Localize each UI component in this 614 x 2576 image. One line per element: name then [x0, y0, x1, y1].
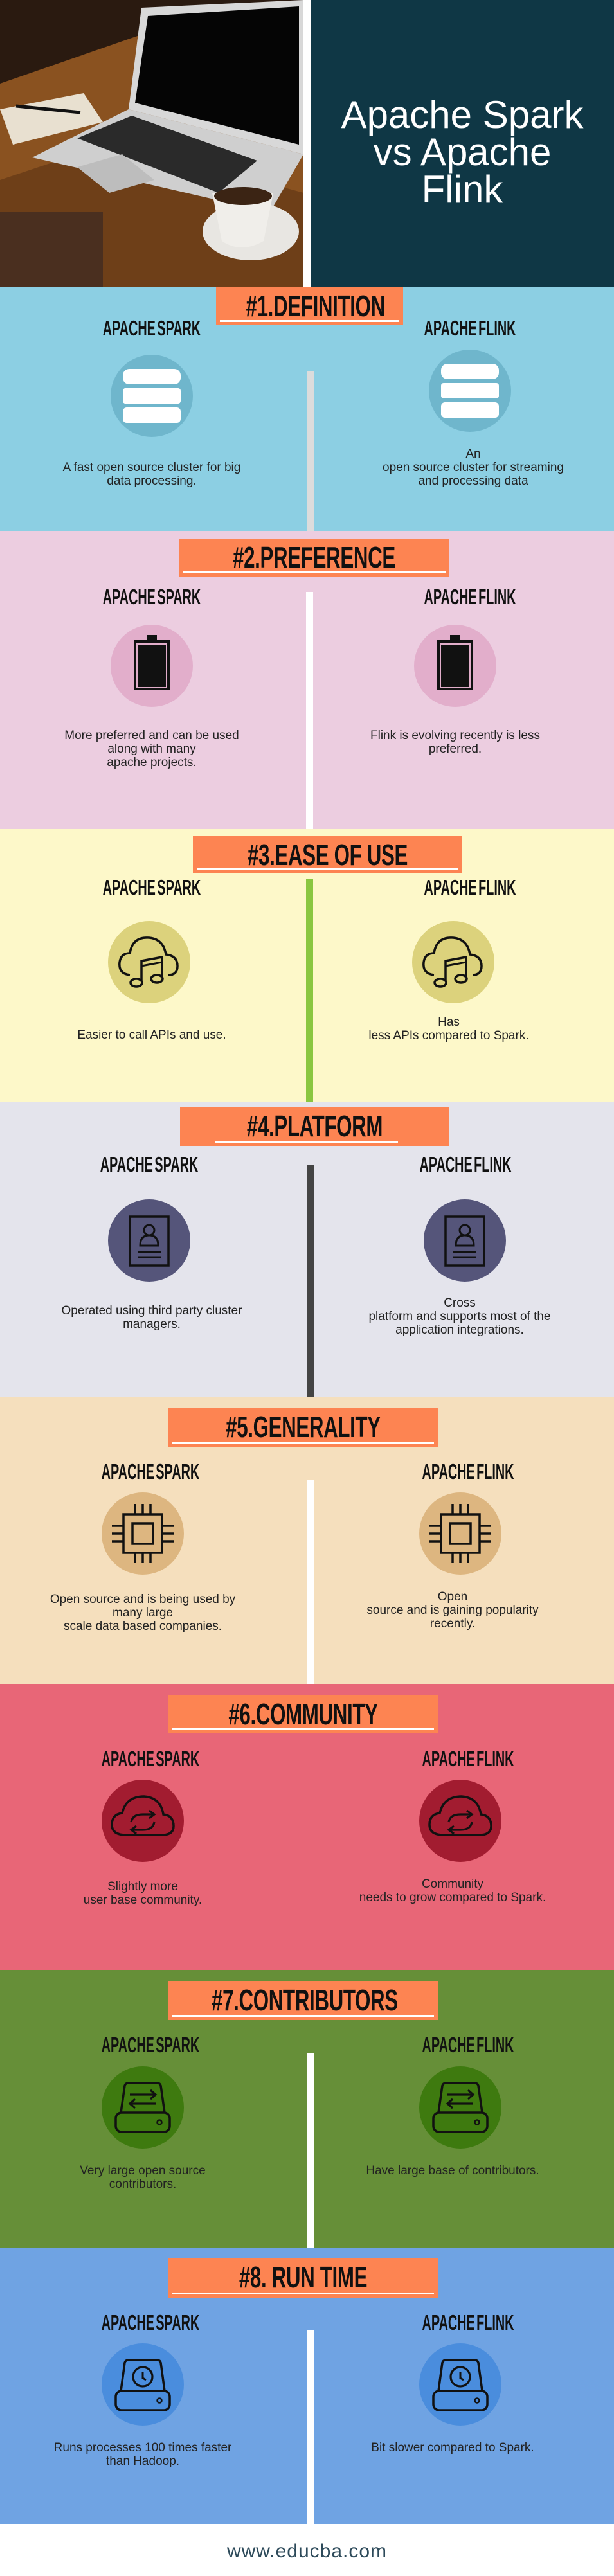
title: vs Apache: [374, 130, 551, 174]
panel: contributors: [0, 1970, 614, 2248]
header: title panel: [311, 0, 614, 287]
text: spark: user base community.: [84, 1893, 202, 1907]
footer: website: www.educba.com: [227, 2541, 387, 2562]
text: flink: Flink is evolving recently is less: [370, 729, 540, 742]
text: spark: managers.: [123, 1318, 181, 1331]
heading: ease of use: [193, 836, 462, 873]
text: flink: Community: [422, 1877, 483, 1891]
text: flink: preferred.: [429, 742, 482, 756]
panel: run time: [0, 2248, 614, 2524]
panel: generality: [0, 1397, 614, 1684]
text: flink: source and is gaining popularity: [366, 1604, 539, 1617]
text: spark: [63, 461, 240, 488]
heading: community: #6.COMMUNITY: [228, 1697, 378, 1731]
text: flink: Open: [438, 1590, 467, 1604]
text: flink: [359, 1877, 546, 1904]
divider: [307, 1480, 314, 1684]
text: spark: scale data based companies.: [64, 1620, 222, 1633]
text: spark: Easier to call APIs and use.: [77, 1028, 226, 1042]
icon: chip flink: [419, 1492, 501, 1575]
title: Apache Spark: [341, 93, 583, 136]
heading: platform: #4.PLATFORM: [247, 1109, 383, 1143]
icon: drive arrows spark: [102, 2066, 184, 2149]
panel: ease of use: [0, 829, 614, 1102]
heading: preference: #2.PREFERENCE: [233, 541, 395, 574]
heading: run time: [168, 2258, 438, 2298]
subheading: spark: APACHE SPARK: [102, 2033, 199, 2057]
subheading: flink: APACHE FLINK: [422, 1460, 514, 1483]
icon: drive clock spark: [102, 2343, 184, 2426]
text: spark: [64, 729, 239, 769]
text: spark: Operated using third party cluster: [62, 1304, 242, 1318]
text: flink: Has: [438, 1015, 460, 1029]
subheading: spark: APACHE SPARK: [103, 585, 201, 609]
text: spark: than Hadoop.: [106, 2455, 179, 2468]
icon: cloud sync spark: [102, 1780, 184, 1862]
heading: generality: [168, 1408, 438, 1447]
icon: clipboard spark: [111, 625, 193, 707]
icon: drive clock flink: [419, 2343, 501, 2426]
text: spark: many large: [113, 1606, 173, 1620]
heading: definition: [216, 287, 403, 325]
subheading: flink: APACHE FLINK: [424, 875, 516, 899]
icon: chip spark: [102, 1492, 184, 1575]
icon: cloud music spark: [108, 921, 190, 1003]
subheading: spark: APACHE SPARK: [100, 1152, 198, 1176]
subheading: spark: APACHE SPARK: [103, 875, 201, 899]
text: flink: recently.: [430, 1617, 475, 1631]
heading: run time: #8. RUN TIME: [239, 2260, 367, 2294]
divider: [306, 879, 313, 1102]
icon: database flink: [429, 350, 511, 432]
subheading: flink: APACHE FLINK: [422, 1747, 514, 1771]
text: flink: needs to grow compared to Spark.: [359, 1891, 546, 1904]
subheading: flink: APACHE FLINK: [420, 1152, 511, 1176]
text: spark: Very large open source: [80, 2164, 206, 2178]
subheading: flink: APACHE FLINK: [422, 2033, 514, 2057]
text: spark: data processing.: [107, 474, 197, 488]
text: spark: [54, 2441, 231, 2468]
text: spark: [84, 1880, 202, 1907]
text: flink: [368, 1015, 529, 1042]
subheading: flink: APACHE FLINK: [424, 316, 516, 340]
text: spark: [62, 1304, 242, 1331]
text: spark: apache projects.: [107, 756, 197, 769]
subheading: spark: APACHE SPARK: [102, 2311, 199, 2334]
heading: contributors: #7.CONTRIBUTORS: [212, 1983, 398, 2017]
text: flink: [368, 1296, 551, 1337]
text: flink: application integrations.: [395, 1323, 524, 1337]
divider: [306, 592, 313, 829]
divider: [307, 371, 314, 531]
text: flink: [370, 729, 540, 756]
panel: community: [0, 1684, 614, 1970]
text: spark: A fast open source cluster for big: [63, 461, 240, 474]
text: spark: along with many: [107, 742, 196, 756]
text: flink: open source cluster for streaming: [383, 461, 564, 474]
divider: [307, 2053, 314, 2248]
icon: profile flink: [424, 1199, 506, 1282]
heading: generality: #5.GENERALITY: [226, 1410, 381, 1444]
icon: cloud music flink: [412, 921, 494, 1003]
header: photo panel: [0, 0, 303, 287]
heading: platform: [180, 1107, 449, 1146]
text: flink: and processing data: [418, 474, 528, 488]
text: flink: [366, 1590, 539, 1631]
subheading: spark: APACHE SPARK: [102, 1747, 199, 1771]
text: flink: Bit slower compared to Spark.: [371, 2441, 534, 2455]
text: spark: contributors.: [109, 2178, 176, 2191]
subheading: spark: APACHE SPARK: [103, 316, 201, 340]
panel: definition: [0, 287, 614, 531]
text: flink: An: [465, 447, 481, 461]
text: spark: More preferred and can be used: [64, 729, 239, 742]
icon: database spark: [111, 355, 193, 437]
icon: clipboard flink: [414, 625, 496, 707]
text: flink: platform and supports most of the: [368, 1310, 551, 1323]
icon: cloud sync flink: [419, 1780, 501, 1862]
text: spark: [80, 2164, 206, 2191]
text: flink: less APIs compared to Spark.: [368, 1029, 529, 1042]
divider: [307, 2330, 314, 2524]
text: spark: [50, 1593, 235, 1633]
icon: drive arrows flink: [419, 2066, 501, 2149]
text: spark: Slightly more: [107, 1880, 178, 1893]
panel: preference: [0, 531, 614, 829]
subheading: flink: APACHE FLINK: [422, 2311, 514, 2334]
divider: [307, 1165, 314, 1397]
subheading: spark: APACHE SPARK: [102, 1460, 199, 1483]
title: Flink: [422, 168, 503, 211]
heading: preference: [179, 539, 449, 577]
text: flink: Have large base of contributors.: [366, 2164, 539, 2178]
heading: definition: #1.DEFINITION: [246, 289, 385, 323]
icon: profile spark: [108, 1199, 190, 1282]
subheading: flink: APACHE FLINK: [424, 585, 516, 609]
heading: contributors: [168, 1981, 438, 2020]
text: flink: Cross: [444, 1296, 476, 1310]
heading: community: [168, 1695, 438, 1733]
text: flink: [383, 447, 564, 488]
panel: platform: [0, 1102, 614, 1397]
title: [341, 93, 584, 211]
text: spark: Open source and is being used by: [50, 1593, 235, 1606]
heading: ease of use: #3.EASE OF USE: [248, 838, 408, 872]
text: spark: Runs processes 100 times faster: [54, 2441, 231, 2455]
